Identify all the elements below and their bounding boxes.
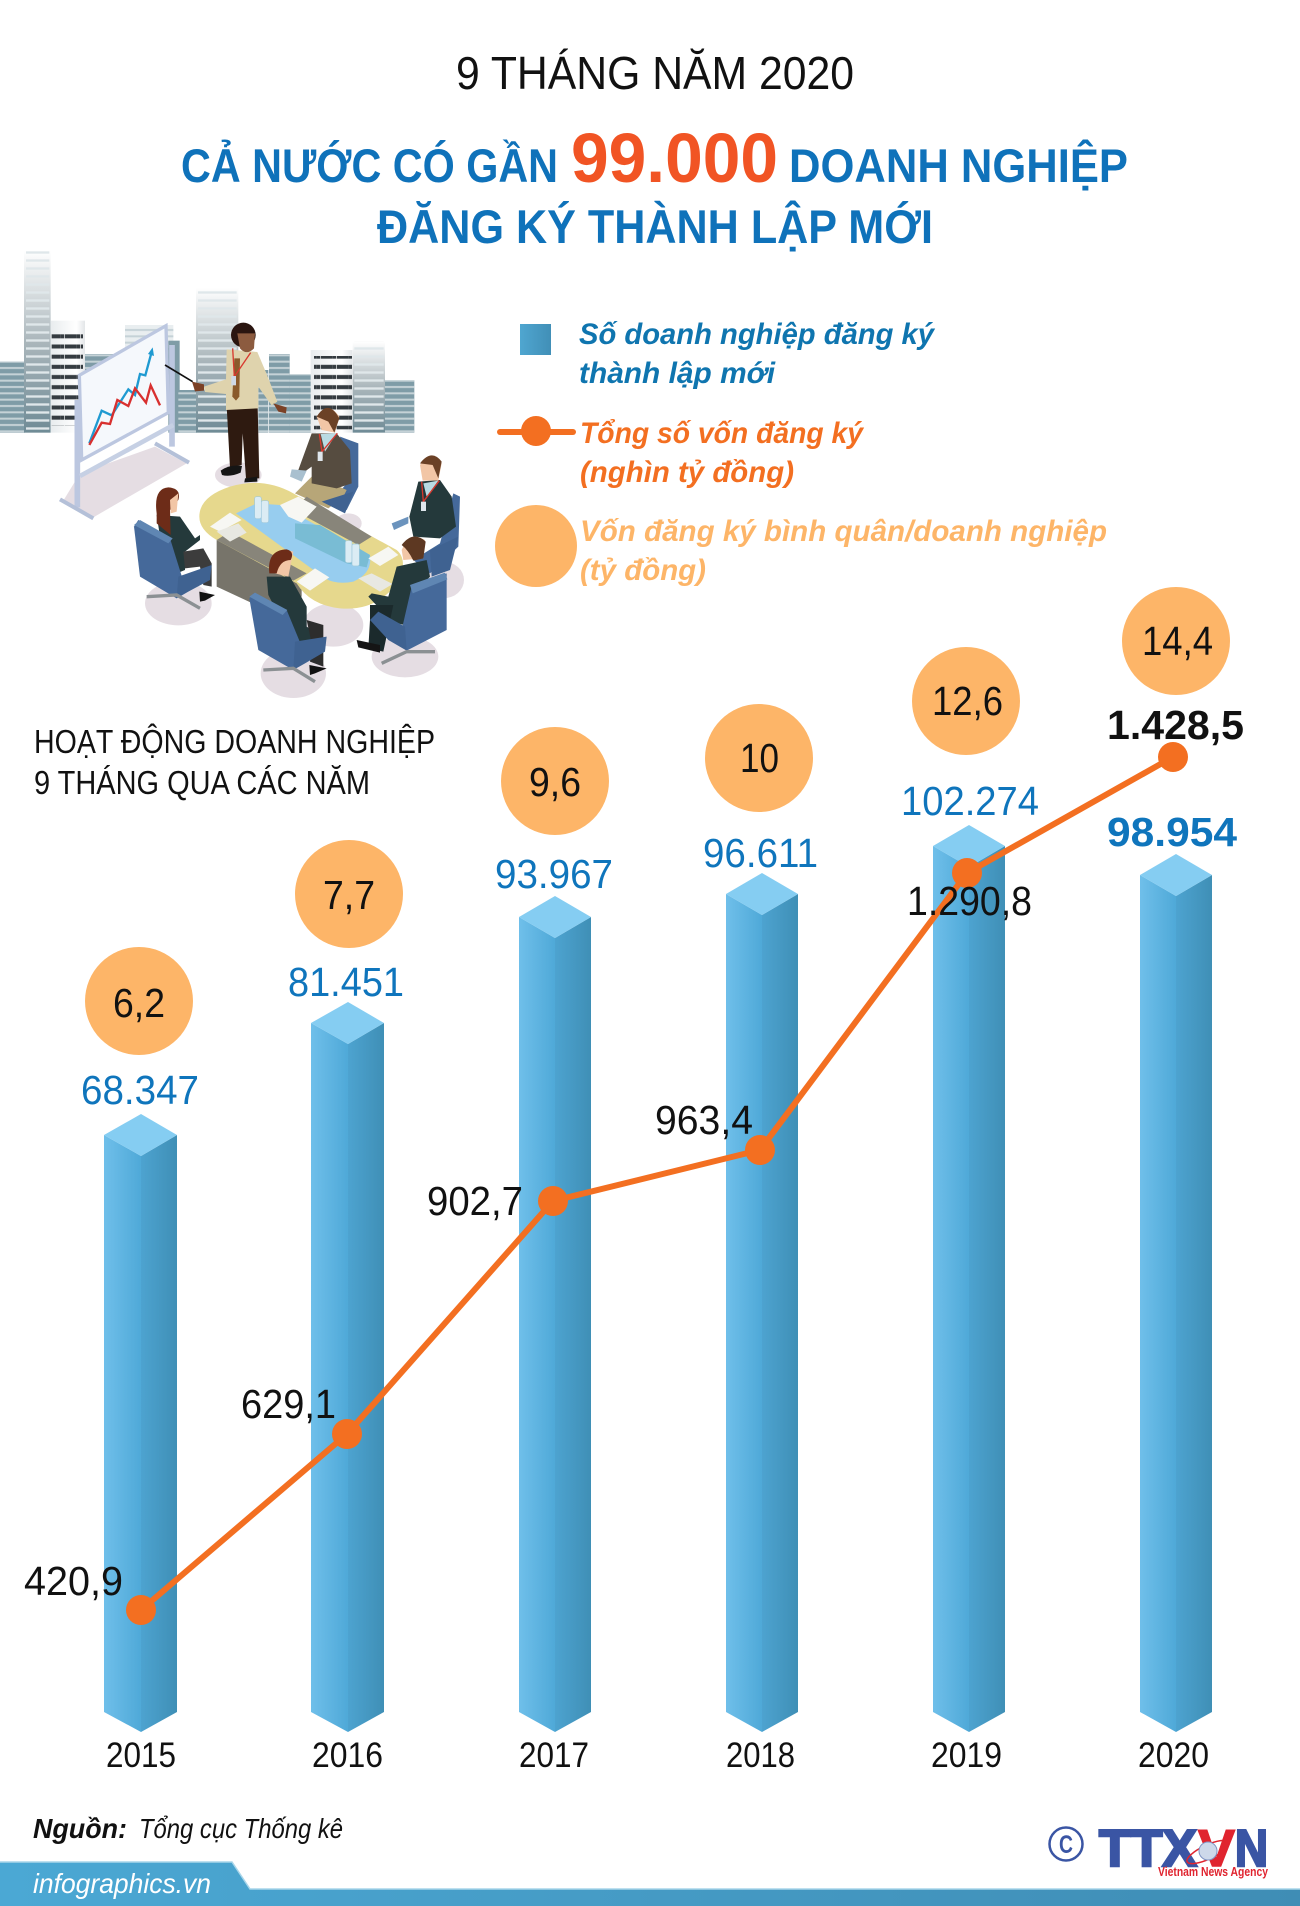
headline: 99.000	[571, 119, 778, 197]
legend item: new enterprises: Số doanh nghiệp đăng ký	[579, 318, 935, 351]
chart subtitle: HOẠT ĐỘNG DOANH NGHIỆP	[34, 723, 435, 760]
headline: DOANH NGHIỆP	[789, 139, 1128, 192]
enterprise count labels: 68.347	[81, 1067, 199, 1113]
city skyline	[0, 251, 414, 433]
legend item: average capital per enterprise	[495, 505, 1107, 587]
average capital values: 10	[740, 735, 779, 781]
illustration: business meeting in front of a city skyline	[0, 251, 464, 698]
source note	[33, 1813, 343, 1844]
page title: 9 tháng năm 2020: 9 THÁNG NĂM 2020	[456, 47, 854, 99]
seated man far right	[392, 455, 460, 577]
year axis labels: 2017	[519, 1736, 589, 1775]
year axis labels: 2015	[106, 1736, 176, 1775]
presenter	[165, 323, 287, 482]
floor shadows	[63, 447, 464, 698]
legend item: total registered capital	[500, 416, 864, 489]
chart subtitle: 9 THÁNG QUA CÁC NĂM	[34, 764, 370, 801]
average capital values: 9,6	[529, 759, 581, 805]
footer band	[0, 1862, 1300, 1906]
year axis labels: 2019	[931, 1736, 1002, 1775]
logo: TTXVN copyright	[1050, 1820, 1268, 1879]
man in front chair	[249, 549, 327, 682]
average capital values	[113, 618, 1213, 1026]
source note: Tổng cục Thống kê	[139, 1813, 343, 1844]
legend item: total registered capital: Tổng số vốn đăng ký	[580, 417, 864, 450]
capital value labels: 1.290,8	[907, 878, 1032, 924]
legend item: total registered capital: (nghìn tỷ đồng)	[580, 456, 794, 489]
average capital values: 7,7	[323, 872, 375, 918]
enterprise count labels: 93.967	[495, 851, 613, 897]
enterprise count labels: 102.274	[901, 778, 1039, 824]
enterprise count labels: 98.954	[1107, 809, 1237, 855]
headline: CẢ NƯỚC CÓ GẦN	[181, 139, 558, 192]
logo: TTXVN copyright: Vietnam News Agency	[1158, 1865, 1268, 1879]
bar 2020	[1140, 854, 1212, 1732]
year axis labels: 2018	[726, 1736, 795, 1775]
legend item: new enterprises: thành lập mới	[579, 357, 776, 390]
average capital values: 14,4	[1142, 618, 1213, 664]
bar 2017	[519, 896, 591, 1732]
enterprise count labels: 81.451	[288, 959, 404, 1005]
logo: TTXVN copyright: N	[1235, 1820, 1268, 1878]
water bottles	[255, 497, 359, 566]
woman in left chair	[134, 487, 215, 608]
legend item: average capital per enterprise: Vốn đăng ký bình quân/doanh nghiệp	[580, 515, 1107, 548]
enterprise count labels	[81, 778, 1237, 1113]
capital value labels	[24, 702, 1244, 1604]
year axis labels	[106, 1736, 1209, 1775]
capital value labels: 629,1	[241, 1381, 336, 1427]
bar 2018	[726, 873, 798, 1732]
legend item: new enterprises	[520, 318, 935, 390]
average capital values: 6,2	[113, 980, 165, 1026]
headline	[181, 119, 1128, 253]
capital value labels: 963,4	[655, 1097, 753, 1143]
capital value labels: 420,9	[24, 1558, 123, 1604]
year axis labels: 2016	[312, 1736, 383, 1775]
man in right front chair	[357, 537, 447, 663]
capital value labels: 1.428,5	[1107, 702, 1244, 748]
bar 2016	[311, 1002, 384, 1732]
year axis labels: 2020	[1138, 1736, 1209, 1775]
logo: TTXVN copyright: V	[1198, 1820, 1235, 1878]
seated man right of presenter	[290, 408, 358, 513]
whiteboard with chart	[60, 326, 189, 518]
average capital circles	[85, 587, 1230, 1055]
logo: TTXVN copyright: TTX	[1099, 1820, 1197, 1878]
legend item: average capital per enterprise: (tỷ đồng)	[580, 554, 706, 587]
chart subtitle	[34, 723, 435, 801]
average capital values: 12,6	[932, 678, 1003, 724]
logo: TTXVN copyright: C	[1059, 1831, 1073, 1859]
capital line series	[126, 742, 1188, 1625]
conference table	[199, 483, 403, 610]
bar 2019	[933, 825, 1005, 1732]
footer band: infographics.vn	[33, 1868, 211, 1899]
bar 2015	[104, 1114, 177, 1732]
enterprise count labels: 96.611	[703, 830, 818, 876]
capital value labels: 902,7	[427, 1178, 523, 1224]
headline: ĐĂNG KÝ THÀNH LẬP MỚI	[377, 200, 933, 253]
legend	[495, 318, 1107, 587]
source note: Nguồn:	[33, 1813, 127, 1844]
bar chart: enterprises per year	[104, 825, 1212, 1732]
